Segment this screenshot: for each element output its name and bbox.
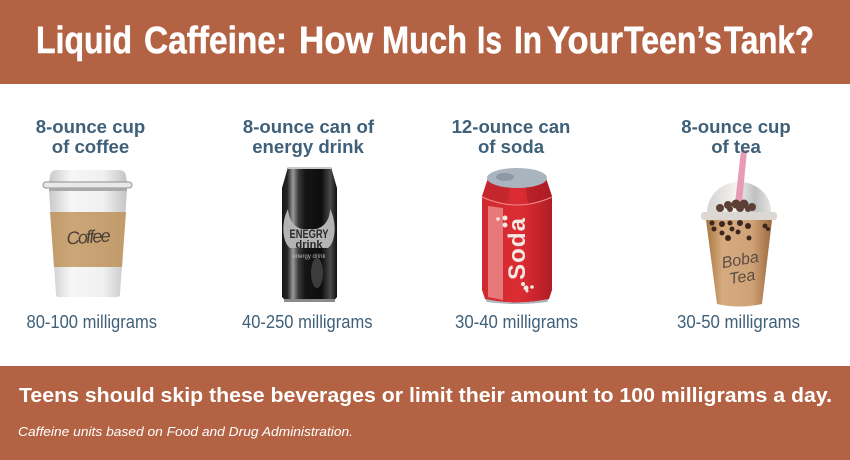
- header banner: [0, 0, 850, 84]
- panel: tea: [677, 116, 800, 332]
- icon: boba tea cup: [701, 150, 777, 306]
- energy drink amount: 40-250 milligrams: [242, 312, 372, 332]
- icon: boba tea cup: Boba: [720, 249, 760, 272]
- coffee amount: 80-100 milligrams: [26, 312, 157, 332]
- title: In: [514, 20, 542, 62]
- soda amount: 30-40 milligrams: [455, 312, 578, 332]
- tea heading: 8-ounce cup: [681, 116, 791, 137]
- icon: coffee cup: Coffee: [66, 226, 111, 249]
- title: Much: [382, 20, 467, 62]
- energy drink heading: 8-ounce can of: [243, 116, 374, 137]
- tea amount: 30-50 milligrams: [677, 312, 800, 332]
- icon: energy drink can: energy drink: [292, 254, 327, 260]
- soda heading: 12-ounce can: [452, 116, 570, 137]
- title: Caffeine:: [144, 20, 287, 62]
- source note: Caffeine units based on Food and Drug Administration.: [18, 424, 353, 439]
- title: Your: [547, 20, 623, 62]
- footer banner: [0, 366, 850, 460]
- icon: soda can: [482, 168, 552, 304]
- coffee heading: of coffee: [52, 136, 129, 157]
- coffee heading: 8-ounce cup: [36, 116, 145, 137]
- energy drink heading: energy drink: [252, 136, 364, 157]
- title: Teen’s: [624, 20, 722, 62]
- icon: coffee cup: [43, 170, 132, 297]
- title: Tank?: [724, 20, 814, 62]
- title: How: [299, 20, 373, 62]
- icon: energy drink can: drink: [296, 239, 323, 251]
- panel: soda: [452, 116, 578, 332]
- panel: energy drink: [242, 116, 375, 332]
- recommendation: Teens should skip these beverages or limit their amount to 100 milligrams a day.: [19, 385, 832, 407]
- icon: boba tea cup: Tea: [728, 267, 757, 288]
- title: Is: [477, 20, 502, 62]
- icon: energy drink can: [282, 167, 337, 302]
- soda heading: of soda: [478, 136, 545, 157]
- tea heading: of tea: [711, 136, 761, 157]
- icon: soda can: Soda: [504, 217, 531, 280]
- icon: energy drink can: ENEGRY: [290, 229, 329, 241]
- title: Liquid: [36, 20, 132, 62]
- panel: coffee: [26, 116, 157, 332]
